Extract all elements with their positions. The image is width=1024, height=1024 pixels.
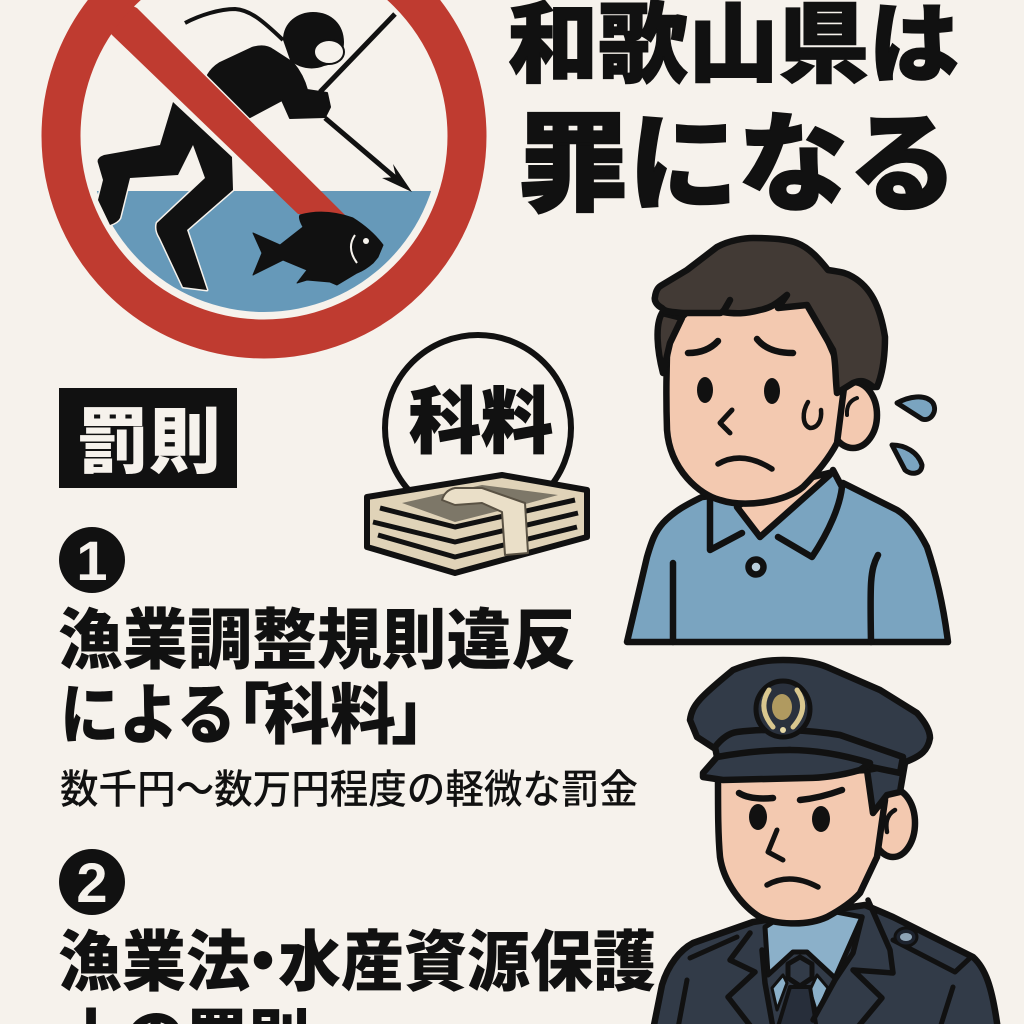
diver	[98, 9, 412, 290]
face	[697, 377, 713, 403]
item 2: 2	[76, 851, 108, 914]
face	[749, 804, 767, 830]
title	[508, 0, 959, 225]
item 1: 」	[391, 678, 457, 752]
water	[96, 191, 432, 312]
cap	[690, 660, 930, 763]
item 1: 1	[76, 529, 108, 592]
hair	[658, 313, 682, 373]
item 2: 水産資源保護	[278, 925, 656, 999]
cap badge	[756, 681, 810, 737]
ear	[871, 789, 915, 857]
sweat drops	[897, 397, 935, 420]
fish	[253, 212, 383, 285]
head	[666, 300, 845, 504]
ear	[829, 382, 877, 448]
uniform	[653, 905, 998, 1024]
icon: fine and banknotes: 科料	[409, 383, 553, 463]
title: 罪になる	[518, 104, 958, 225]
head	[718, 770, 885, 923]
item 1: 数千円～数万円程度の軽微な罰金	[60, 768, 638, 812]
item 1: 「	[204, 678, 270, 752]
icon: worried man	[627, 238, 948, 642]
item 2	[58, 849, 656, 1024]
hair	[867, 763, 905, 813]
item 1	[58, 527, 638, 812]
item 2: 漁業法	[58, 925, 250, 999]
heading: penalties: 罰則	[77, 403, 221, 483]
item 1: 漁業調整規則違反	[58, 603, 576, 677]
icon: police officer	[653, 660, 998, 1024]
icon: fine and banknotes	[367, 335, 587, 573]
icon: no spearfishing prohibition sign	[61, 0, 467, 339]
item 2: ・	[230, 925, 296, 999]
item 1: 科料	[264, 678, 396, 752]
shirt	[627, 483, 948, 642]
collar	[710, 470, 842, 557]
item 1: による	[60, 678, 236, 752]
heading: penalties	[59, 388, 237, 488]
prohibition bar and ring	[95, 0, 346, 216]
banknote stack	[367, 475, 587, 573]
